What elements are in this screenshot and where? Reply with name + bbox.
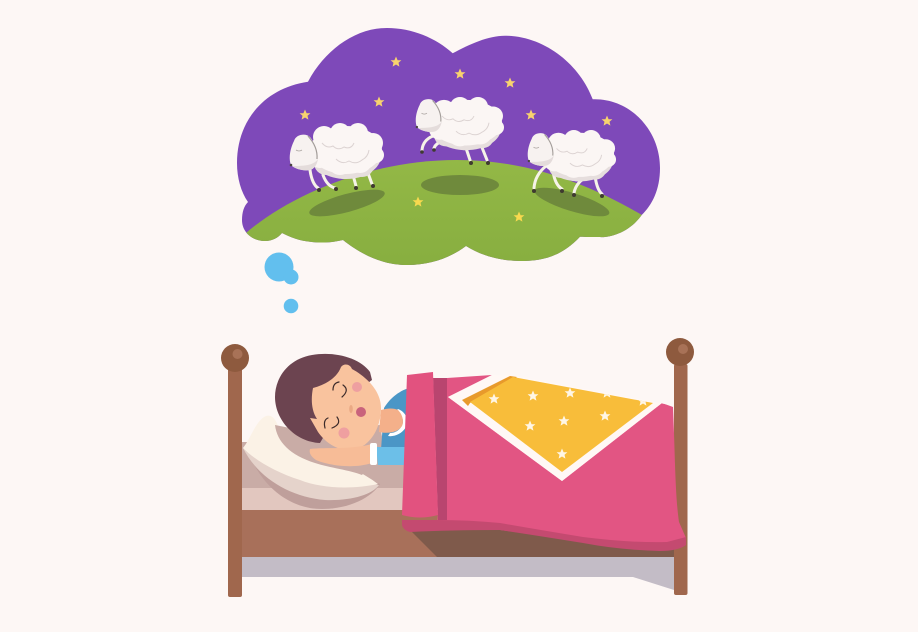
face [310,365,381,450]
left bedpost [221,344,249,597]
folded corner lining shadow [462,376,517,406]
thought bubbles [264,252,298,313]
bed frame [240,510,676,557]
cuff [370,443,377,465]
fold shadow [433,378,447,520]
sky stars [300,56,612,126]
white collar [388,409,407,436]
folded corner lining [470,377,653,472]
blanket shadow on frame [408,522,677,557]
night sky [237,28,660,265]
pillow [243,416,384,509]
mattress [242,488,417,510]
boy [275,354,412,466]
fold strip [402,372,438,518]
blanket main [437,375,686,550]
blue pajama shoulder [381,387,412,450]
thought cloud [237,28,660,265]
hill stars [413,196,524,222]
right bedpost [666,338,694,595]
lining stars [489,388,648,459]
sheep left [290,123,384,192]
sheep middle [416,97,504,165]
closed eyes [324,382,346,428]
illustration: boy counting sheep [221,28,694,597]
blue sleeve [376,447,412,465]
sheep right [528,130,616,198]
floor shadow [242,557,674,590]
blanket [402,372,686,551]
sheep shadows [307,175,612,222]
neck [379,408,403,433]
mattress upper [242,442,417,488]
hand [310,444,372,466]
hair [275,354,372,443]
cheeks [352,382,362,392]
folded corner border [448,375,670,481]
nose [349,405,353,413]
green hill [246,160,642,265]
blanket lower band [402,520,686,551]
bed [221,338,694,597]
